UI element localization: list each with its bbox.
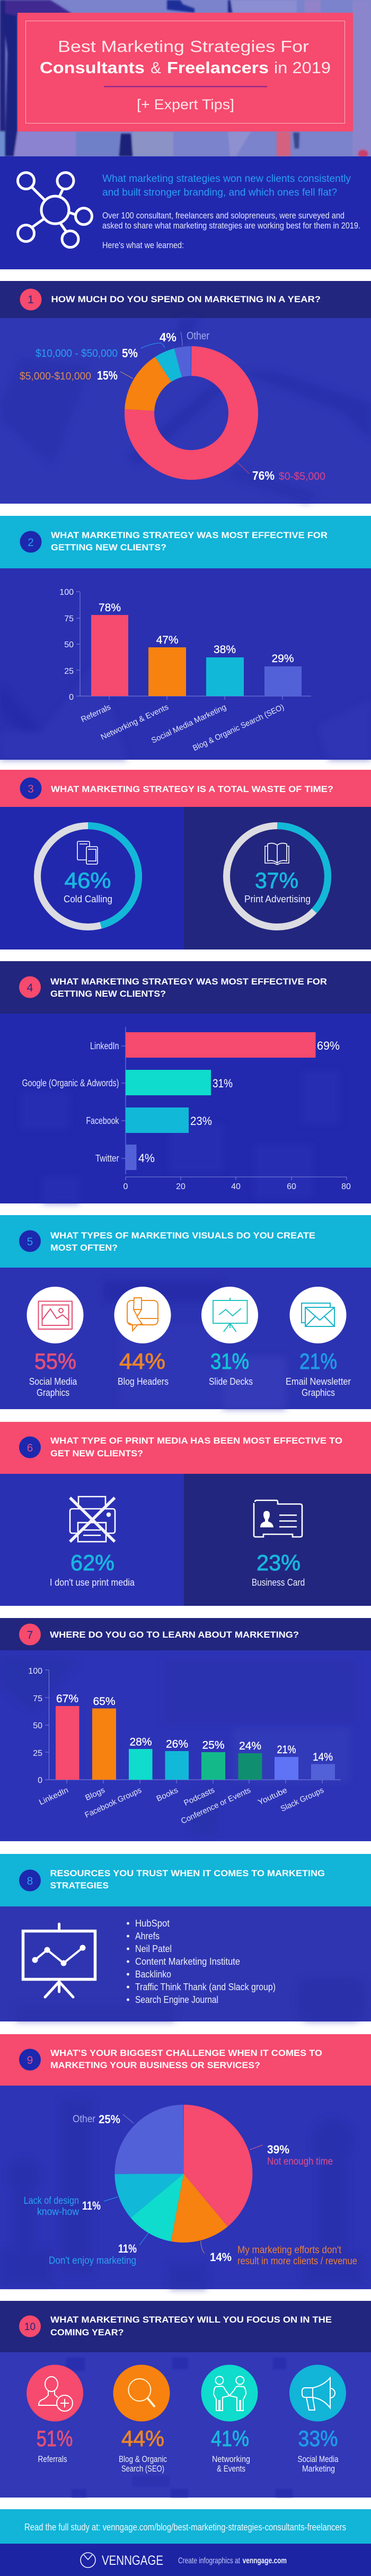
- number badge: [19, 1869, 41, 1892]
- label: $5,000-$10,000: $5,000-$10,000: [20, 371, 91, 382]
- bar: facebook groups: Facebook Groups: [83, 1786, 143, 1820]
- item: slide decks: 31%: [210, 1349, 249, 1374]
- icon: megaphone: [302, 2378, 335, 2410]
- label: no results: My marketing efforts don't: [237, 2245, 342, 2256]
- number badge: [19, 1437, 41, 1458]
- resource list: Traffic Think Thank (and Slack group): [135, 1982, 276, 1992]
- item: slide decks: Slide Decks: [209, 1376, 253, 1387]
- heading: RESOURCES YOU TRUST WHEN IT COMES TO MARKETING: [50, 1869, 325, 1878]
- item: blog & organic search: [113, 2364, 170, 2474]
- heading: WHAT MARKETING STRATEGY IS A TOTAL WASTE OF TIME?: [51, 785, 333, 794]
- heading: [50, 1231, 315, 1253]
- leader lines: [104, 2114, 263, 2253]
- x axis labels: 60: [287, 1182, 296, 1191]
- title line 2: Consultants: [40, 58, 145, 77]
- bar: conference or events: 24%: [239, 1740, 261, 1752]
- item: networking & events: [201, 2364, 258, 2474]
- bar: blogs: Blogs: [84, 1786, 107, 1803]
- item: referrals: 51%: [37, 2426, 73, 2451]
- bar: slack groups: Slack Groups: [279, 1786, 325, 1814]
- credit line: Create infographics at: [178, 2556, 240, 2565]
- y axis labels: 0: [38, 1776, 42, 1785]
- item: referrals: Referrals: [38, 2454, 67, 2464]
- item: blog & organic search: 44%: [121, 2426, 164, 2451]
- y axis labels: 75: [64, 614, 74, 623]
- bar: google: [22, 1070, 233, 1095]
- bar: referrals: 78%: [99, 602, 121, 614]
- intro question: and built stronger branding, and which ones fell flat?: [102, 187, 337, 198]
- stat: no print media: 62%: [70, 1550, 114, 1575]
- item: social media marketing: Marketing: [302, 2464, 335, 2474]
- bar: twitter: 4%: [138, 1151, 155, 1165]
- bar: linkedin: LinkedIn: [38, 1786, 70, 1807]
- item: blog & organic search: Search (SEO): [121, 2464, 164, 2474]
- heading: GETTING NEW CLIENTS?: [51, 543, 166, 552]
- number badge: 2: [28, 537, 34, 549]
- title line 2: &: [151, 58, 161, 77]
- panel: question 5: [0, 1215, 371, 1409]
- bar: linkedin: [90, 1032, 340, 1058]
- icon: presentation board: [213, 1298, 247, 1332]
- label: $0-$5,000: $0-$5,000: [279, 471, 325, 482]
- panel: question 2: [0, 516, 371, 760]
- label: don't enjoy marketing: [49, 2242, 137, 2266]
- bar: slack groups: 14%: [313, 1751, 333, 1763]
- panel: question 10: [0, 2301, 371, 2498]
- label: $0-$5,000: 76%: [252, 469, 275, 482]
- label: $5,000-$10,000: 15%: [97, 368, 118, 382]
- bar: podcasts: 25%: [202, 1739, 225, 1752]
- resource list: [127, 1918, 276, 2005]
- bar chart: [59, 588, 311, 753]
- y axis labels: 100: [28, 1667, 42, 1676]
- title card: [17, 13, 353, 131]
- panel: intro: [0, 156, 371, 269]
- background texture: [0, 318, 371, 504]
- bar: slack groups: [279, 1751, 335, 1814]
- stat: no print media: I don't use print media: [50, 1577, 135, 1588]
- bar: youtube: [257, 1744, 298, 1807]
- bar: networking: [100, 634, 186, 742]
- bar: referrals: Referrals: [80, 702, 112, 724]
- label: lack of design: 11%: [82, 2199, 101, 2212]
- label: not enough time: [267, 2143, 333, 2167]
- stat: cold calling: [37, 826, 139, 927]
- bar: facebook: 23%: [190, 1114, 212, 1128]
- bar: linkedin: 69%: [317, 1039, 340, 1052]
- panel: question 1: [0, 281, 371, 504]
- number badge: 10: [24, 2322, 36, 2333]
- bar: social media: [150, 644, 244, 745]
- y axis labels: 100: [59, 588, 74, 597]
- item: networking & events: Networking: [212, 2454, 250, 2464]
- title line 2: in 2019: [274, 58, 331, 77]
- title line 1: Best Marketing Strategies For: [58, 37, 309, 56]
- panel: question 6: [0, 1422, 371, 1606]
- item: blog headers: 44%: [119, 1349, 165, 1374]
- pie chart: [149, 2139, 218, 2208]
- heading: [50, 977, 327, 999]
- resource list: HubSpot: [135, 1918, 170, 1929]
- label: $5,000-$10,000: [20, 368, 118, 382]
- heading: GETTING NEW CLIENTS?: [50, 989, 166, 999]
- y axis labels: 50: [64, 640, 74, 649]
- number badge: [20, 531, 41, 552]
- heading: WHAT TYPES OF MARKETING VISUALS DO YOU CREATE: [50, 1231, 315, 1241]
- stat: print advertising: [227, 826, 328, 927]
- item: social media marketing: 33%: [298, 2426, 338, 2451]
- number badge: 9: [27, 2054, 33, 2067]
- bar: facebook groups: 28%: [129, 1736, 152, 1748]
- stat: no print media: [50, 1497, 135, 1588]
- label: no results: result in more clients / revenue: [237, 2256, 357, 2267]
- venngage logo: [81, 2553, 163, 2568]
- icon: picture frame: [38, 1301, 72, 1329]
- stat: business card: Business Card: [252, 1577, 305, 1588]
- label: other: [160, 330, 209, 344]
- number badge: 8: [27, 1875, 33, 1887]
- heading: [50, 1436, 342, 1458]
- resource list: Content Marketing Institute: [135, 1956, 240, 1967]
- item: networking & events: 41%: [211, 2426, 249, 2451]
- bar: books: Books: [155, 1786, 180, 1804]
- number badge: [19, 977, 41, 998]
- bar: podcasts: [182, 1739, 225, 1808]
- y axis labels: 75: [33, 1694, 42, 1703]
- number badge: [20, 288, 41, 311]
- label: $0-$5,000: [252, 469, 325, 482]
- label: other: Other: [73, 2114, 96, 2125]
- panel: question 8: [0, 1854, 371, 2021]
- bar: linkedin: 67%: [56, 1693, 78, 1705]
- number badge: 6: [27, 1442, 33, 1454]
- panel: read the full study: [0, 2509, 371, 2544]
- icon: envelopes: [302, 1303, 334, 1326]
- leader lines: [120, 332, 249, 473]
- label: not enough time: 39%: [267, 2143, 289, 2156]
- donut chart: [139, 361, 243, 465]
- y axis labels: 25: [64, 667, 74, 676]
- bar: blogs: [84, 1695, 116, 1803]
- heading: [50, 2315, 332, 2337]
- number badge: [19, 1623, 41, 1646]
- icon: pen and notebook: [127, 1298, 158, 1331]
- heading: MARKETING YOUR BUSINESS OR SERVICES?: [50, 2061, 260, 2070]
- bar: conference or events: Conference or Events: [180, 1786, 252, 1826]
- label: lack of design: [24, 2195, 101, 2218]
- label: $10,000 - $50,000: 5%: [122, 346, 138, 360]
- heading: COMING YEAR?: [50, 2328, 124, 2337]
- stat: business card: [252, 1500, 305, 1588]
- icon: crossed printer: [70, 1497, 115, 1542]
- label: don't enjoy marketing: 11%: [118, 2242, 137, 2255]
- bar: blogs: 65%: [93, 1695, 116, 1708]
- heading: [50, 1869, 325, 1891]
- resource list: Backlinko: [135, 1969, 171, 1980]
- label: not enough time: Not enough time: [267, 2156, 333, 2167]
- y axis labels: [59, 588, 74, 702]
- bar: google: Google (Organic & Adwords): [22, 1078, 119, 1088]
- icon: network: [18, 173, 92, 247]
- bar: linkedin: [38, 1693, 80, 1807]
- panel: question 7: [0, 1618, 371, 1841]
- bar: books: [155, 1738, 189, 1804]
- heading: [51, 531, 328, 552]
- item: blog headers: [114, 1287, 171, 1387]
- background texture: [16, 1977, 366, 2021]
- heading: WHERE DO YOU GO TO LEARN ABOUT MARKETING?: [50, 1630, 299, 1640]
- bar: blog: [191, 653, 302, 753]
- item: networking & events: & Events: [217, 2464, 245, 2474]
- y axis labels: [28, 1667, 42, 1785]
- label: other: [73, 2113, 120, 2126]
- item: referrals: [26, 2364, 83, 2464]
- horizontal bar chart: [22, 1027, 351, 1191]
- number badge: 1: [28, 294, 34, 306]
- bar: linkedin: LinkedIn: [90, 1041, 119, 1051]
- heading: MOST OFTEN?: [50, 1243, 118, 1253]
- label: other: 25%: [99, 2113, 120, 2126]
- item: blog headers: Blog Headers: [118, 1376, 169, 1387]
- x axis labels: 20: [176, 1182, 186, 1191]
- intro question: [102, 173, 351, 198]
- y axis labels: 0: [69, 693, 74, 702]
- bar: social media: Social Media Marketing: [150, 702, 228, 745]
- number badge: [20, 777, 41, 799]
- item: email newsletter graphics: [286, 1287, 351, 1398]
- item: slide decks: [201, 1287, 258, 1387]
- bar: twitter: [95, 1145, 155, 1170]
- icon: business card: [254, 1500, 302, 1537]
- bar: google: 31%: [213, 1077, 233, 1090]
- intro body text: [102, 210, 360, 250]
- background texture: [0, 663, 371, 760]
- bar: youtube: 21%: [277, 1744, 296, 1756]
- heading: WHAT MARKETING STRATEGY WAS MOST EFFECTIVE FOR: [51, 531, 328, 540]
- heading: WHAT'S YOUR BIGGEST CHALLENGE WHEN IT COMES TO: [50, 2049, 322, 2058]
- bar: books: 26%: [166, 1738, 188, 1751]
- bar: conference or events: [180, 1740, 262, 1826]
- y axis labels: 50: [33, 1721, 42, 1730]
- panel: question 4: [0, 961, 371, 1203]
- bar: networking: Networking & Events: [100, 702, 170, 742]
- item: email newsletter graphics: Graphics: [302, 1387, 335, 1398]
- resource list: Ahrefs: [135, 1931, 160, 1941]
- number badge: [19, 1230, 41, 1252]
- label: no results: 14%: [210, 2250, 232, 2264]
- bar: facebook: [86, 1107, 212, 1133]
- panel: question 9: [0, 2034, 371, 2289]
- label: lack of design: know-how: [37, 2206, 79, 2218]
- subtitle: [+ Expert Tips]: [137, 96, 234, 112]
- icon: magnifier: [128, 2379, 155, 2407]
- heading: STRATEGIES: [50, 1881, 109, 1891]
- item: social media graphics: [26, 1287, 84, 1398]
- background texture: [0, 1654, 355, 1834]
- x axis labels: 40: [231, 1182, 241, 1191]
- item: email newsletter graphics: Email Newsletter: [286, 1376, 351, 1387]
- item: social media graphics: Graphics: [37, 1387, 69, 1398]
- stat: cold calling: 46%: [65, 868, 111, 893]
- intro question: What marketing strategies won new clients consistently: [102, 173, 351, 184]
- number badge: [19, 2316, 41, 2337]
- bar: referrals: [80, 602, 128, 724]
- item: social media graphics: Social Media: [29, 1376, 77, 1387]
- x axis labels: [123, 1182, 351, 1191]
- item: social media marketing: Social Media: [298, 2454, 339, 2464]
- heading: [50, 2049, 322, 2070]
- heading: HOW MUCH DO YOU SPEND ON MARKETING IN A YEAR?: [51, 295, 321, 304]
- panel: hero: [0, 0, 371, 158]
- title line 2: [40, 58, 331, 77]
- icon: phones: [77, 841, 98, 864]
- bar: blog: 29%: [271, 653, 294, 665]
- number badge: 4: [27, 982, 33, 994]
- hero background photo: [0, 0, 371, 158]
- bar: podcasts: Podcasts: [182, 1786, 216, 1808]
- heading: WHAT MARKETING STRATEGY WILL YOU FOCUS ON IN THE: [50, 2315, 332, 2325]
- venngage logo: VENNGAGE: [102, 2553, 163, 2568]
- stat: business card: 23%: [257, 1550, 301, 1575]
- heading: WHAT TYPE OF PRINT MEDIA HAS BEEN MOST EFFECTIVE TO: [50, 1436, 342, 1446]
- background texture: [21, 1071, 339, 1203]
- x axis labels: 80: [341, 1182, 351, 1191]
- icon: add person: [39, 2377, 73, 2411]
- icon: book: [265, 843, 289, 865]
- icon: handshake: [214, 2376, 246, 2411]
- credit line: venngage.com: [243, 2556, 287, 2565]
- stat: print advertising: Print Advertising: [244, 894, 311, 904]
- stat: cold calling: Cold Calling: [64, 894, 112, 904]
- heading: WHAT MARKETING STRATEGY WAS MOST EFFECTIVE FOR: [50, 977, 327, 987]
- label: $10,000 - $50,000: $10,000 - $50,000: [36, 348, 118, 359]
- number badge: 3: [28, 783, 34, 795]
- intro body text: Here's what we learned:: [102, 240, 184, 250]
- bar: blog: Blog & Organic Search (SEO): [191, 702, 286, 753]
- item: social media marketing: [289, 2364, 346, 2474]
- label: don't enjoy marketing: Don't enjoy marketing: [49, 2255, 136, 2266]
- background texture: [66, 2358, 293, 2498]
- label: lack of design: Lack of design: [24, 2195, 79, 2206]
- bar: social media: 38%: [214, 644, 236, 656]
- heading: GET NEW CLIENTS?: [50, 1449, 143, 1458]
- x axis labels: 0: [123, 1182, 128, 1191]
- bar: facebook: Facebook: [86, 1115, 119, 1126]
- resource list: Neil Patel: [135, 1944, 172, 1954]
- resource list: Search Engine Journal: [135, 1994, 218, 2005]
- item: social media graphics: 55%: [34, 1349, 76, 1374]
- item: email newsletter graphics: 21%: [299, 1349, 337, 1374]
- label: other: Other: [187, 330, 209, 342]
- label: no results: [210, 2245, 357, 2267]
- bar: facebook groups: [83, 1736, 153, 1820]
- bar: twitter: Twitter: [95, 1153, 119, 1164]
- panel: footer: [0, 2544, 371, 2576]
- number badge: 7: [27, 1629, 33, 1641]
- stat: print advertising: 37%: [255, 868, 298, 893]
- panel: question 3: [0, 770, 371, 949]
- number badge: 5: [27, 1236, 33, 1248]
- number badge: [19, 2049, 41, 2071]
- bar: youtube: Youtube: [257, 1786, 289, 1807]
- background texture: [103, 1280, 286, 1409]
- title line 2: Freelancers: [167, 58, 269, 77]
- label: other: 4%: [160, 330, 176, 344]
- bar chart: [28, 1667, 341, 1826]
- item: blog & organic search: Blog & Organic: [119, 2454, 167, 2464]
- y axis labels: 25: [33, 1749, 42, 1758]
- bar: networking: 47%: [156, 634, 179, 646]
- background texture: chess pieces: [0, 2099, 363, 2289]
- icon: presentation board: [23, 1924, 95, 1997]
